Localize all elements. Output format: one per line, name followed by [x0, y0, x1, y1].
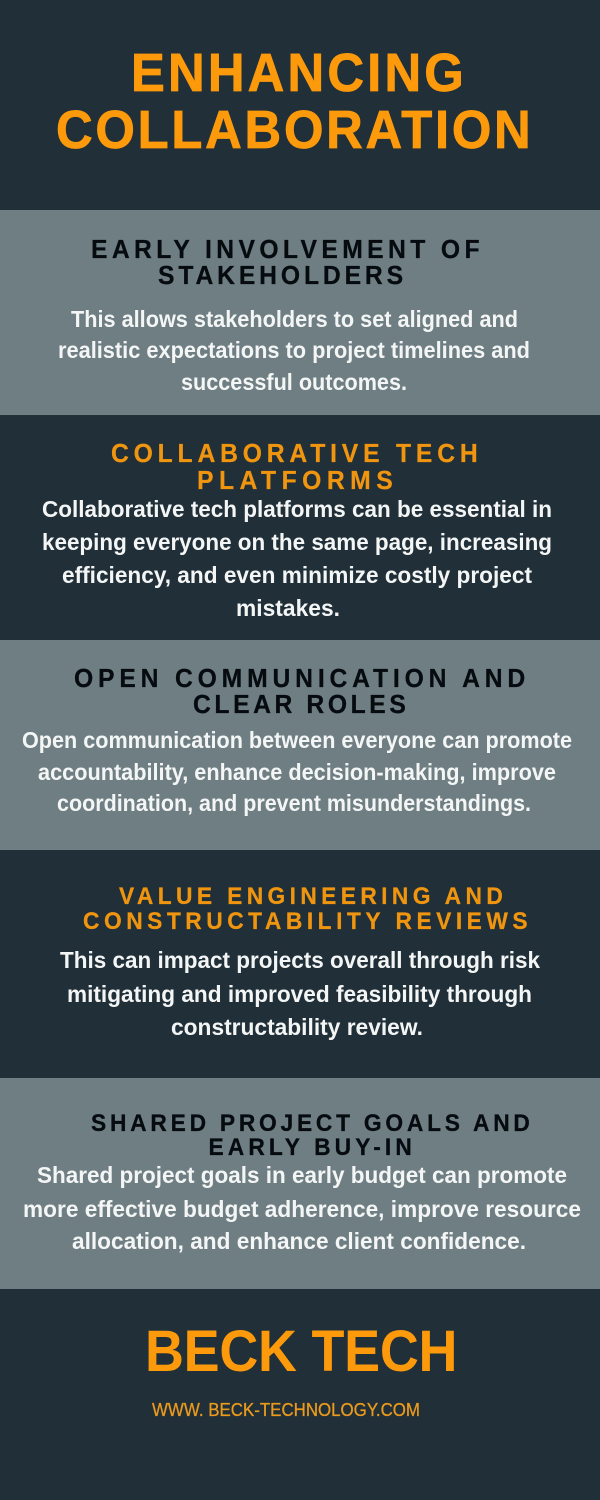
text block: open communication — [22, 727, 572, 816]
panel: value engineering and constructability reviews — [0, 850, 600, 1078]
heading: value engineering: CONSTRUCTABILITY REVIEWS — [83, 907, 528, 934]
title: ENHANCING — [131, 44, 464, 103]
heading: early involvement — [91, 235, 480, 290]
text block: open communication: coordination, and prevent misunderstandings. — [57, 790, 531, 816]
text block: shared project goals — [23, 1162, 581, 1254]
footer brand name: BECK TECH — [145, 1318, 457, 1383]
panel: early involvement of stakeholders — [0, 210, 600, 415]
panel: open communication and clear roles — [0, 640, 600, 850]
text block: collaborative tech platforms: mistakes. — [236, 595, 340, 621]
text block: value engineering: This can impact projects overall through risk — [60, 947, 540, 973]
text block: shared project goals: more effective budget adherence, improve resource — [23, 1196, 581, 1222]
text block: collaborative tech platforms: Collaborative tech platforms can be essential in — [42, 496, 552, 522]
heading: open communication: OPEN COMMUNICATION AND — [74, 664, 525, 693]
text block: value engineering — [60, 947, 540, 1040]
heading: collaborative tech platforms: COLLABORATIVE TECH — [111, 439, 478, 468]
heading: open communication: CLEAR ROLES — [193, 690, 406, 719]
text block: open communication: accountability, enhance decision-making, improve — [38, 759, 556, 785]
heading: shared project goals: EARLY BUY-IN — [208, 1133, 412, 1160]
text block: early involvement — [58, 306, 530, 395]
text block: early involvement: successful outcomes. — [181, 369, 407, 395]
heading: shared project goals: SHARED PROJECT GOALS AND — [91, 1109, 530, 1136]
text block: early involvement: This allows stakeholders to set aligned and — [71, 306, 518, 332]
heading: early involvement: STAKEHOLDERS — [158, 261, 403, 290]
text block: open communication: Open communication between everyone can promote — [22, 727, 572, 753]
text block: collaborative tech platforms: efficiency, and even minimize costly project — [62, 562, 532, 588]
title: COLLABORATION — [56, 101, 531, 160]
text block: early involvement: realistic expectations to project timelines and — [58, 337, 530, 363]
heading: open communication — [74, 664, 525, 719]
heading: early involvement: EARLY INVOLVEMENT OF — [91, 235, 480, 264]
text block: value engineering: constructability review. — [171, 1014, 423, 1040]
text block: shared project goals: allocation, and enhance client confidence. — [72, 1228, 526, 1254]
heading: shared project goals — [91, 1109, 530, 1160]
text block: value engineering: mitigating and improved feasibility through — [67, 981, 532, 1007]
heading: collaborative tech platforms: PLATFORMS — [197, 466, 393, 495]
heading: value engineering: VALUE ENGINEERING AND — [119, 882, 503, 909]
text block: collaborative tech platforms: keeping everyone on the same page, increasing — [42, 529, 552, 555]
heading: value engineering — [83, 882, 528, 934]
title — [56, 44, 531, 160]
text block: collaborative tech platforms — [42, 496, 552, 621]
text block: shared project goals: Shared project goals in early budget can promote — [37, 1162, 567, 1188]
footer website: WWW. BECK-TECHNOLOGY.COM — [152, 1400, 420, 1420]
heading: collaborative tech platforms — [111, 439, 478, 495]
panel: collaborative tech platforms — [0, 415, 600, 640]
panel: shared project goals and early buy-in — [0, 1078, 600, 1289]
